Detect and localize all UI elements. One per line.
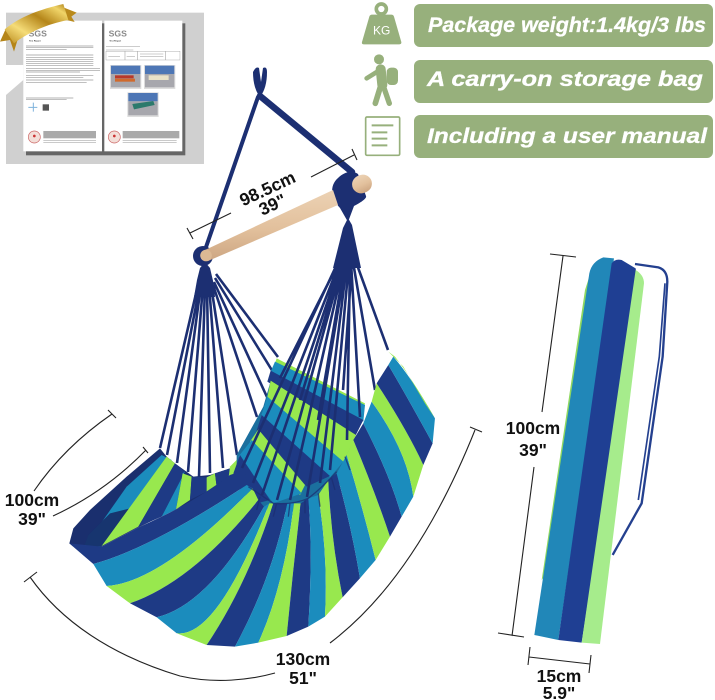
right rope knot [333, 218, 361, 268]
gold ribbon [0, 4, 77, 52]
icon: weight KG [362, 4, 401, 44]
dimension: seat depth 100cm: 100cm [5, 490, 59, 510]
report page 2 [104, 21, 182, 151]
feature: package weight [414, 4, 713, 47]
dimension: seat width 130cm: 51" [289, 668, 317, 688]
dimension: seat depth 100cm [5, 410, 148, 529]
dimension: bag length 100cm: 39" [519, 440, 547, 460]
feature: user manual [414, 115, 713, 158]
dimension: seat width 130cm [24, 427, 482, 688]
dimension: bar width 98.5cm: 39" [256, 190, 289, 219]
feature: package weight: Package weight:1.4kg/3 lbs [428, 14, 706, 37]
feature: storage bag: A carry-on storage bag [426, 68, 703, 91]
icon: manual document [366, 117, 400, 155]
hanging ropes [205, 68, 352, 250]
dimension: bag width 15cm [528, 647, 591, 700]
dimension: seat depth 100cm: 39" [18, 509, 46, 529]
left rope loop [193, 246, 213, 266]
product photo [127, 92, 159, 117]
report page 1: SGS [29, 29, 47, 39]
back rest fabric [233, 358, 365, 513]
icon: hiker with backpack [367, 54, 398, 103]
bag green stripe [582, 270, 644, 644]
right fan of ropes [242, 262, 388, 500]
dimension: seat width 130cm: 130cm [276, 649, 330, 669]
bag navy stripe [558, 260, 637, 643]
product photo [144, 65, 175, 89]
dimension: bar width 98.5cm [187, 149, 357, 239]
right rope loop [332, 172, 366, 222]
left fan of ropes [160, 274, 278, 477]
panel: SGS test report [0, 4, 204, 164]
report page 1 [23, 21, 102, 151]
product photo [110, 65, 141, 89]
gathered hem ruffles [248, 457, 350, 517]
report page 2: Test Report [109, 40, 121, 43]
bag teal stripe [534, 257, 614, 640]
bag drawstring [613, 264, 667, 555]
hammock chair [69, 68, 435, 647]
icon: weight KG: KG [373, 24, 390, 38]
dimension: bag width 15cm: 15cm [537, 666, 581, 686]
wooden spreader bar [193, 172, 375, 266]
left rope knot [194, 262, 215, 297]
dimension: bag length 100cm: 100cm [506, 418, 560, 438]
hammock front fabric [69, 352, 435, 647]
feature: storage bag [414, 60, 713, 103]
feature: user manual: Including a user manual [427, 125, 708, 148]
storage bag [534, 257, 667, 644]
report page 1: Test Report [29, 40, 41, 43]
bar [205, 190, 338, 261]
dimension: bag length 100cm [498, 254, 576, 637]
report page 2: SGS [109, 29, 127, 39]
hammock pocket [69, 448, 250, 552]
dimension: bar width 98.5cm: 98.5cm [236, 167, 299, 210]
